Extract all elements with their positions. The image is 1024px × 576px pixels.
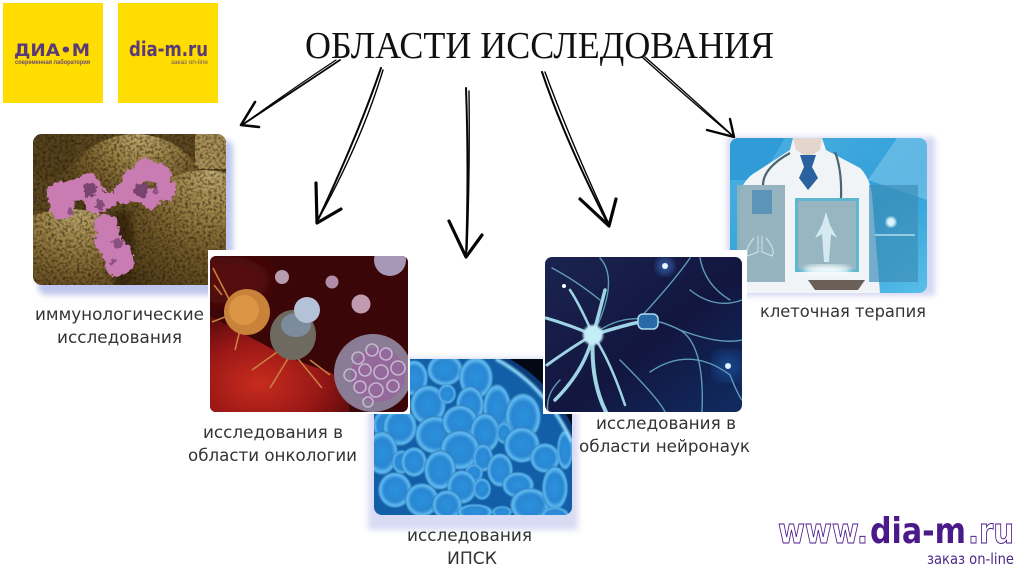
panel: oncology <box>208 250 410 414</box>
label: iPSC: ИПСК <box>447 549 497 569</box>
doctor coat <box>740 138 880 293</box>
website logo: заказ on-line <box>927 550 1014 568</box>
logo: ДИА•М: ДИА•М <box>14 41 90 61</box>
tumour spikes <box>212 268 330 388</box>
label: neuroscience: исследования в <box>596 414 736 434</box>
arrow: to immunology <box>241 60 340 127</box>
arrow: to cell therapy <box>642 57 734 137</box>
image: blue stem cells <box>374 359 572 515</box>
panel: immunology <box>33 134 236 298</box>
logo: dia-m.ru: заказ on-line <box>171 60 209 66</box>
logo: dia-m.ru: dia-m.ru <box>129 37 208 61</box>
label: immunology: иммунологические <box>35 305 204 325</box>
screen center <box>795 198 859 272</box>
stethoscope <box>763 152 841 198</box>
screen left <box>737 185 785 282</box>
arrow: to iPSC <box>449 88 482 257</box>
small balls <box>294 297 320 323</box>
tablet and hand <box>808 280 865 290</box>
panel: cell therapy <box>727 137 935 296</box>
grey cell <box>270 310 316 360</box>
big purple cell <box>334 334 412 412</box>
logo: ДИА•М <box>3 3 103 103</box>
website logo: www. <box>778 512 868 552</box>
arrow: to neuroscience <box>542 72 616 226</box>
image: immune cells attacking tumour <box>210 256 408 412</box>
label: cell therapy: клеточная терапия <box>760 302 926 322</box>
panel: iPSC <box>366 354 578 530</box>
tie <box>799 155 818 190</box>
logo: dia-m.ru <box>118 3 218 103</box>
image: antibody on tissue <box>33 134 226 285</box>
website logo: .ru <box>968 512 1014 552</box>
screen right <box>869 185 918 282</box>
logo: ДИА•М: современная лаборатория <box>15 59 90 66</box>
label: iPSC: исследования <box>407 526 532 546</box>
dark corner with bright rim <box>498 359 572 440</box>
label: oncology: области онкологии <box>188 446 357 466</box>
label: neuroscience: области нейронаук <box>579 437 750 457</box>
label: oncology: исследования в <box>203 423 343 443</box>
title: ОБЛАСТИ ИССЛЕДОВАНИЯ <box>305 25 774 67</box>
cell body <box>583 325 603 345</box>
panel: neuroscience <box>543 250 747 414</box>
image: doctor with holographic screens <box>730 138 927 293</box>
label: immunology: исследования <box>57 328 182 348</box>
arrow: to oncology <box>316 68 383 223</box>
image: neuron <box>545 257 742 412</box>
website logo <box>778 511 1014 568</box>
synapse node <box>638 314 658 329</box>
website logo: dia-m <box>870 511 966 552</box>
cells <box>374 359 572 515</box>
icon: antibody <box>47 158 176 277</box>
orange cell <box>224 289 270 335</box>
dendrites <box>548 258 742 412</box>
